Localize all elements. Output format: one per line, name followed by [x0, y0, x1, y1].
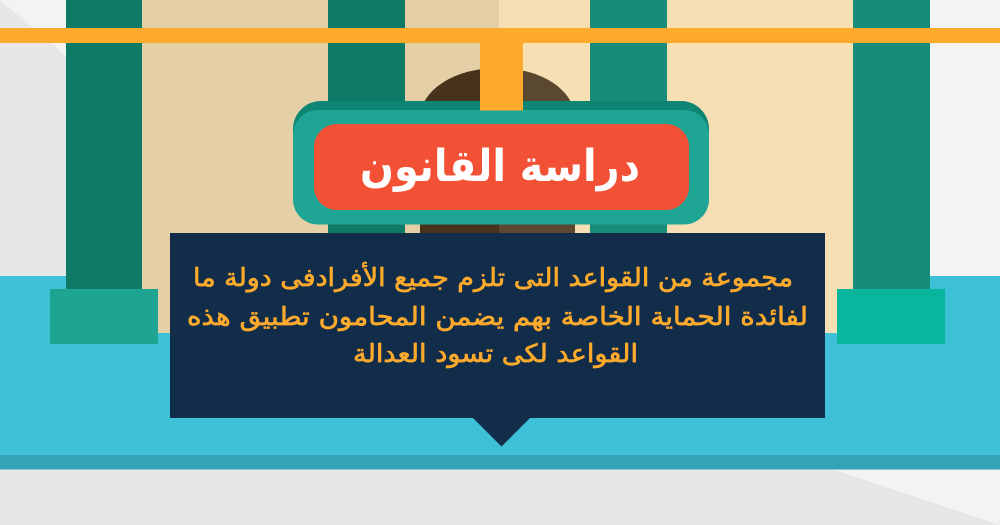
title sign — [293, 43, 709, 224]
definition callout — [170, 233, 825, 446]
text line 3: القواعد لكى تسود العدالة — [353, 339, 638, 368]
text line 2: لفائدة الحماية الخاصة بهم يضمن المحامون تطبيق هذه — [187, 302, 808, 332]
column: inner left — [328, 0, 405, 240]
definition text — [187, 261, 808, 368]
orange hanging bar — [0, 28, 1000, 43]
callout box — [170, 233, 825, 446]
arched door — [420, 68, 575, 240]
sign frame — [293, 101, 709, 224]
title: دراسة القانون — [360, 141, 640, 192]
column: far right — [837, 0, 945, 344]
column: far left — [50, 0, 158, 344]
floor — [0, 276, 1000, 470]
text line 1: مجموعة من القواعد التى تلزم جميع الأفرادفى دولة ما — [193, 261, 793, 293]
title plate — [314, 124, 689, 210]
column: inner right — [590, 0, 667, 240]
building wall — [142, 0, 853, 333]
sign hanger — [480, 43, 523, 110]
